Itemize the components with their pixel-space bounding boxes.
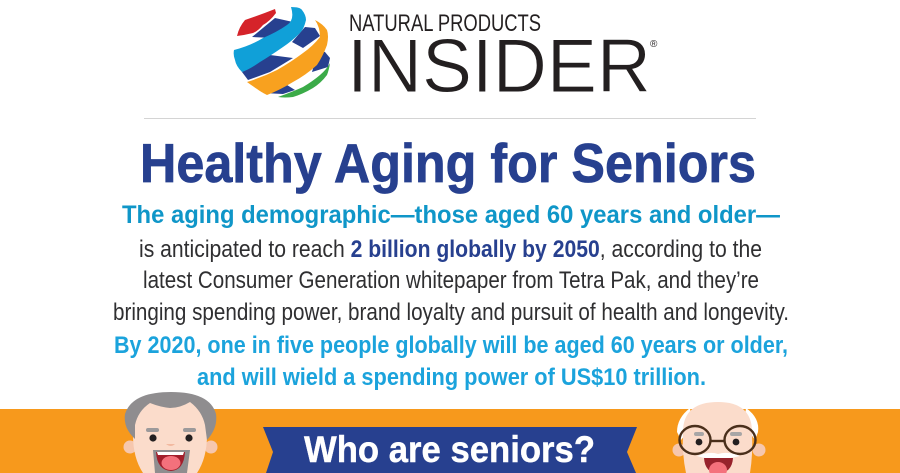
face — [683, 402, 752, 473]
beard — [153, 450, 190, 473]
eyebrows — [694, 432, 704, 436]
eyes — [149, 434, 157, 442]
nose — [166, 444, 175, 446]
mouth — [704, 458, 733, 473]
orange section band — [0, 409, 900, 473]
ears — [672, 444, 686, 456]
ribbon heading — [263, 427, 637, 473]
ribbon shape — [263, 427, 637, 473]
intro body line 2: latest Consumer Generation whitepaper from Tetra Pak, and they’re — [143, 267, 759, 294]
logo text: Natural Products: NATURAL PRODUCTS — [349, 10, 541, 37]
moustache — [697, 453, 740, 459]
logo text: Insider: INSIDER — [347, 24, 651, 109]
intro highlight line: The aging demographic—those aged 60 years and older— — [122, 201, 780, 229]
title: Healthy Aging for Seniors — [140, 132, 756, 194]
icon: senior man with glasses — [672, 402, 766, 473]
divider — [144, 118, 756, 119]
intro text block — [113, 201, 789, 391]
hair — [125, 392, 216, 440]
logo: Natural Products Insider — [234, 7, 658, 109]
eyes — [696, 439, 702, 445]
intro body line 1: is anticipated to reach 2 billion globally by 2050, according to the — [139, 236, 762, 263]
side hair — [677, 408, 692, 440]
intro body line 3: bringing spending power, brand loyalty and pursuit of health and longevity. — [113, 299, 789, 326]
glasses — [680, 426, 756, 454]
icon: senior man with beard — [124, 392, 218, 473]
intro highlight line 3: and will wield a spending power of US$10 trillion. — [197, 364, 706, 391]
logo registered mark: ® — [650, 39, 658, 50]
face — [133, 396, 207, 473]
heading text: Who are seniors? — [304, 429, 595, 470]
mouth — [156, 452, 185, 471]
intro highlight line 2: By 2020, one in five people globally will be aged 60 years or older, — [114, 332, 788, 359]
ears — [124, 440, 136, 454]
eyebrows — [146, 428, 159, 432]
icon: striped globe — [234, 7, 330, 98]
